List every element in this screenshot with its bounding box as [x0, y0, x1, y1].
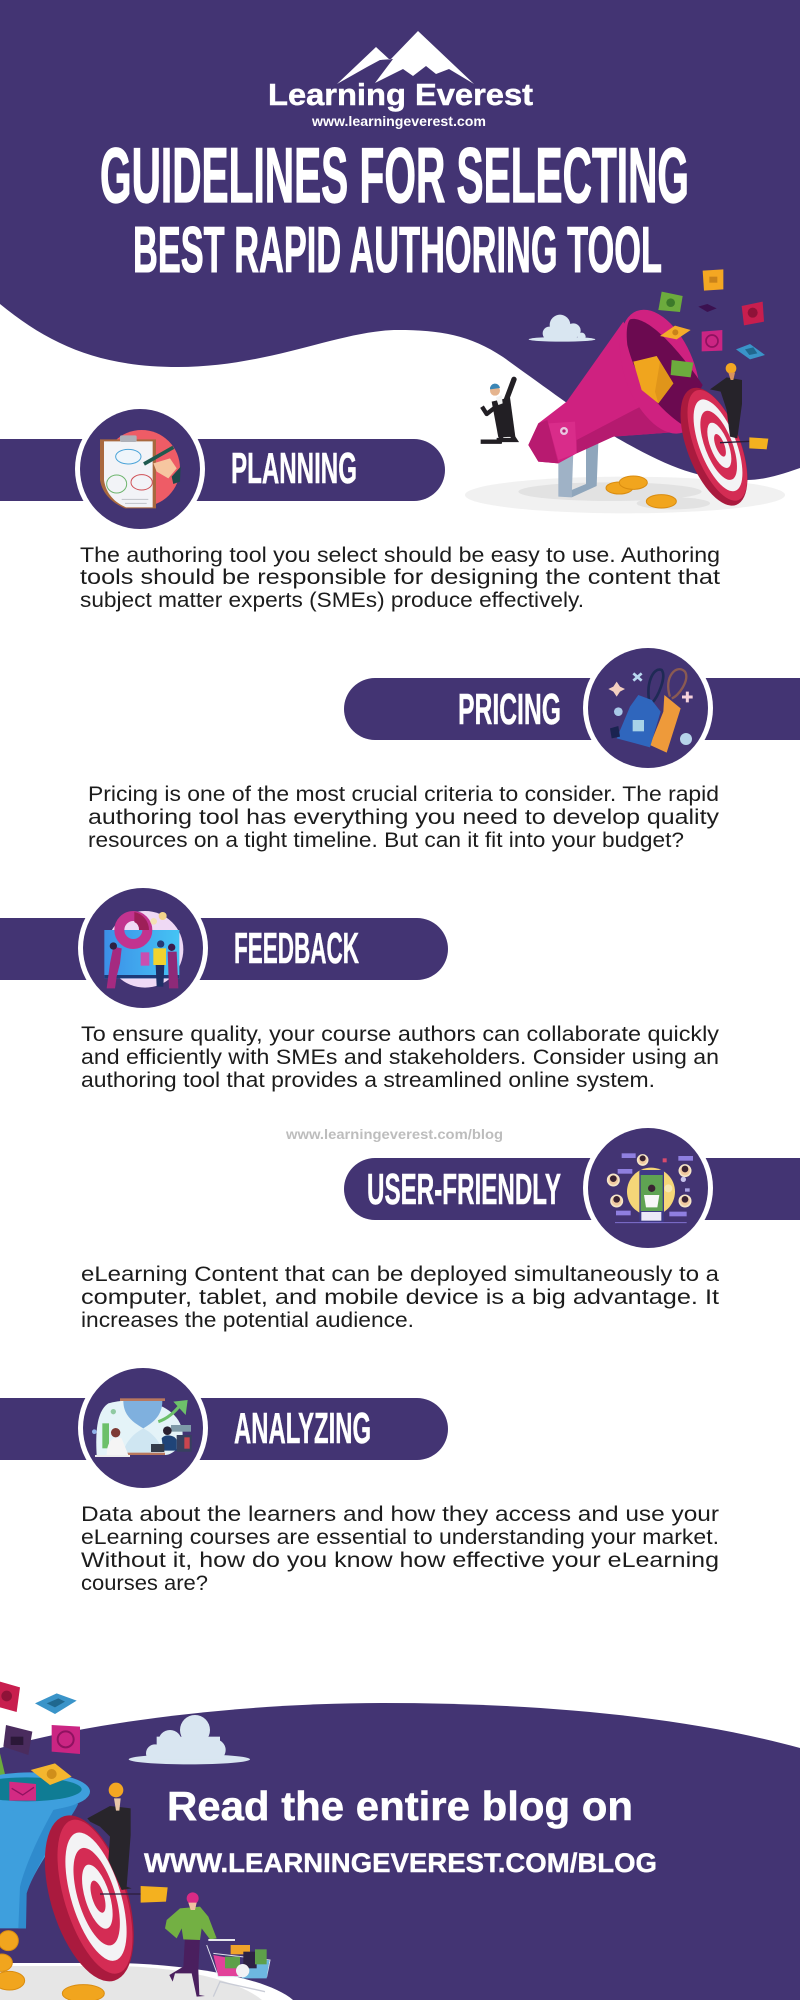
body text — [81, 1263, 719, 1332]
heading text: ANALYZING — [234, 1405, 371, 1453]
jumping man — [481, 379, 515, 442]
watermark url: www.learningeverest.com/blog — [285, 1126, 503, 1142]
body text: tools should be responsible for designing the content that — [80, 566, 720, 589]
cloud — [529, 315, 595, 342]
arrow — [720, 441, 750, 443]
body text — [88, 783, 720, 852]
section: pricing — [88, 643, 800, 852]
box — [633, 356, 673, 403]
logo name: Learning Everest — [268, 77, 533, 112]
target — [28, 1805, 151, 1992]
body text: Pricing is one of the most crucial criteria to consider. The rapid — [88, 783, 719, 806]
body text: courses are? — [81, 1572, 208, 1595]
icon: mountain — [337, 31, 474, 84]
floating cards — [0, 1682, 20, 1712]
body text: authoring tool has everything you need to develop quality — [88, 806, 720, 829]
footer background — [0, 1703, 800, 2000]
body text — [81, 1023, 720, 1092]
body text — [80, 544, 720, 612]
icon badge: hourglass and analysts — [78, 1363, 208, 1493]
megaphone body — [528, 322, 682, 463]
heading bar — [344, 678, 800, 740]
body text: eLearning courses are essential to understanding your market. — [81, 1526, 719, 1549]
floating cards — [671, 360, 693, 377]
coins — [0, 1931, 104, 2000]
section: feedback — [0, 883, 720, 1092]
heading bar — [344, 1158, 800, 1220]
shopping cart — [207, 1945, 270, 1977]
target — [667, 379, 761, 514]
footer heading: Read the entire blog on — [167, 1783, 633, 1829]
man on target — [710, 377, 742, 438]
section: user-friendly — [81, 1123, 800, 1332]
title — [100, 131, 689, 286]
stand — [558, 447, 573, 497]
body text — [81, 1503, 719, 1595]
heading text: PRICING — [458, 686, 561, 734]
body text: Without it, how do you know how effective your eLearning — [81, 1549, 719, 1572]
arrow — [100, 1892, 142, 1896]
footer panel — [0, 1682, 800, 2000]
footer url: WWW.LEARNINGEVEREST.COM/BLOG — [144, 1848, 657, 1878]
illustration: funnel, target and shopper — [0, 1682, 270, 2000]
body text: eLearning Content that can be deployed simultaneously to a — [81, 1263, 719, 1286]
icon badge: team at a screen — [78, 883, 208, 1013]
icon badge: price tags — [583, 643, 713, 773]
man on target — [87, 1806, 132, 1890]
body text: computer, tablet, and mobile device is a big advantage. It — [81, 1286, 719, 1309]
illustration: megaphone with target — [465, 269, 785, 514]
body text: resources on a tight timeline. But can it fit into your budget? — [88, 829, 684, 852]
body text: and efficiently with SMEs and stakeholders. Consider using an — [81, 1046, 719, 1069]
logo: Learning Everest — [268, 31, 533, 129]
section: planning — [0, 404, 720, 612]
cloud — [129, 1715, 250, 1764]
funnel — [0, 1797, 78, 1928]
body text: To ensure quality, your course authors can collaborate quickly — [81, 1023, 720, 1046]
coins — [606, 476, 676, 508]
heading bar — [0, 439, 445, 501]
body text: increases the potential audience. — [81, 1309, 414, 1332]
heading bar — [0, 1398, 448, 1460]
body text: Data about the learners and how they access and use your — [81, 1503, 719, 1526]
body text: The authoring tool you select should be easy to use. Authoring — [80, 544, 720, 567]
icon badge: clipboard — [75, 404, 205, 534]
heading text: PLANNING — [231, 445, 357, 493]
heading text: USER-FRIENDLY — [367, 1166, 561, 1214]
section: analyzing — [0, 1363, 719, 1595]
ground shadow — [465, 477, 785, 513]
footer floor — [0, 1963, 293, 2000]
heading text: FEEDBACK — [234, 925, 359, 973]
logo url: www.learningeverest.com — [311, 114, 486, 129]
shopper — [169, 1937, 205, 1997]
body text: subject matter experts (SMEs) produce effectively. — [80, 589, 584, 612]
icon badge: phone with people — [583, 1123, 713, 1253]
body text: authoring tool that provides a streamlined online system. — [81, 1069, 655, 1092]
header wave background — [0, 0, 800, 480]
heading bar — [0, 918, 448, 980]
